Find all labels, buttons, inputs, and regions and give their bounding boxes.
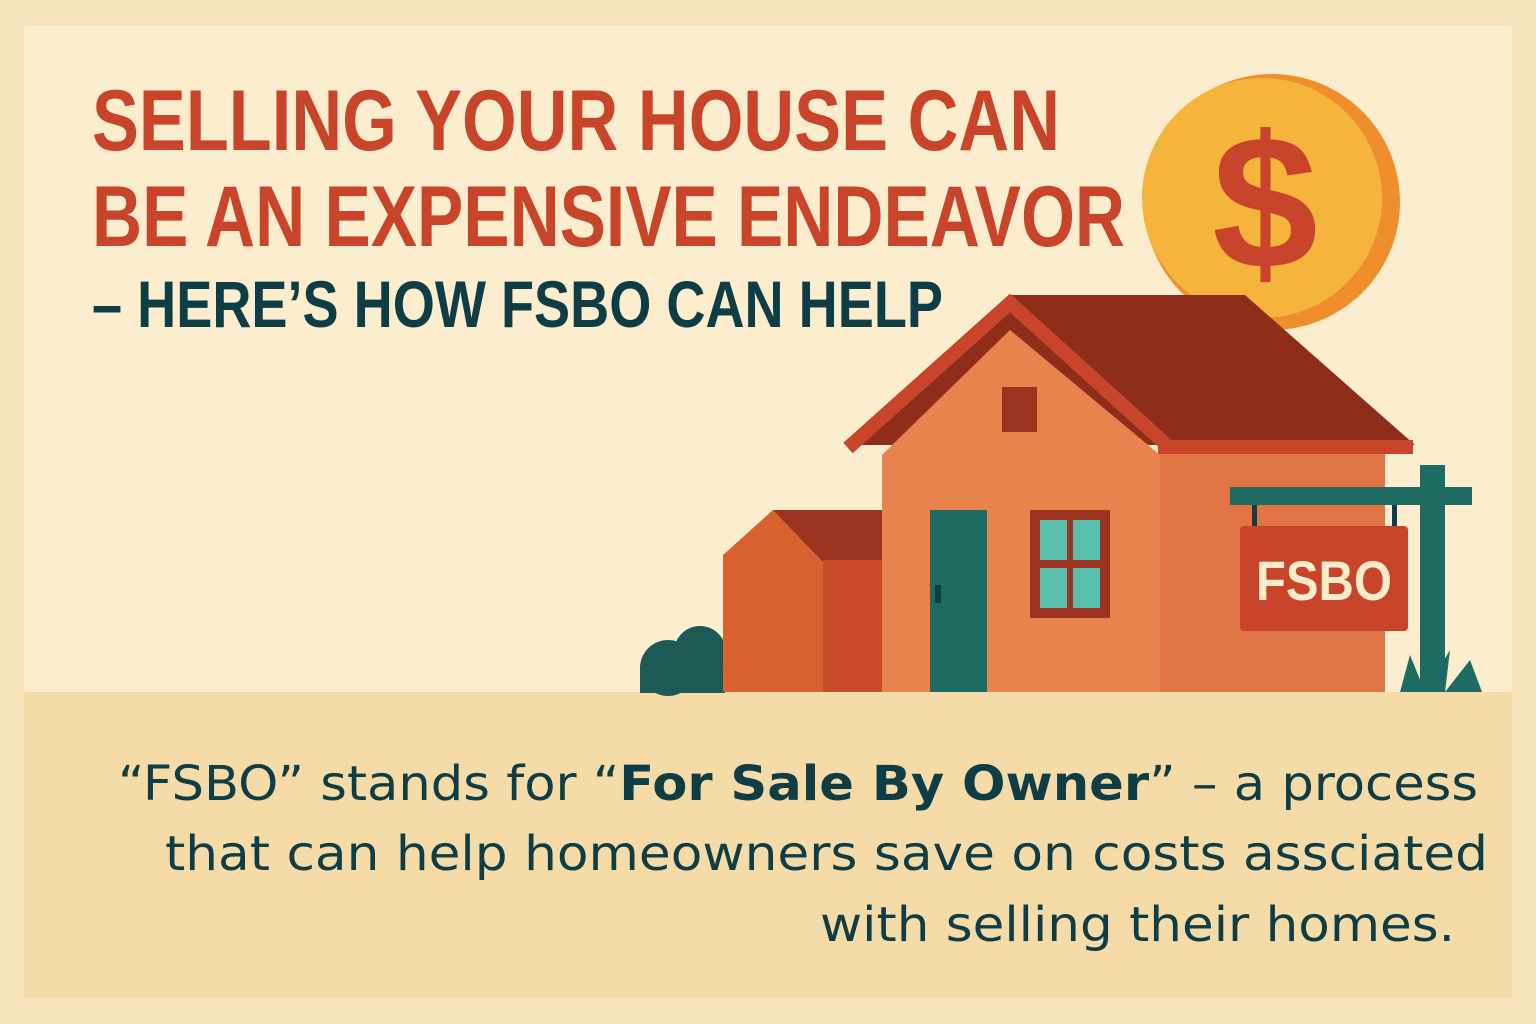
window	[1030, 510, 1110, 618]
text block: FSBO definition	[118, 756, 1488, 953]
title	[92, 73, 1125, 341]
panel: bottom band	[24, 692, 1512, 998]
house	[723, 295, 1415, 692]
front gable wall	[882, 330, 1160, 692]
attic window	[1002, 387, 1037, 432]
text block: FSBO definition: with selling their homes.	[820, 897, 1455, 953]
door	[930, 510, 987, 692]
panel: top background	[24, 26, 1512, 693]
roof	[845, 295, 1415, 445]
title: – HERE’S HOW FSBO CAN HELP	[92, 267, 943, 341]
title: BE AN EXPENSIVE ENDEAVOR	[92, 169, 1125, 265]
garage	[723, 510, 882, 692]
gable trim	[848, 303, 1170, 448]
title: SELLING YOUR HOUSE CAN	[92, 73, 1060, 169]
text block: FSBO definition: “FSBO” stands for “ For Sale By Owner ” – a process	[118, 756, 1478, 812]
sign: FSBO	[1230, 465, 1482, 692]
text block: FSBO definition: that can help homeowners save on costs assciated	[165, 826, 1488, 882]
side wall	[1158, 445, 1385, 692]
sign: FSBO: FSBO	[1256, 549, 1392, 612]
icon: bush	[640, 626, 726, 696]
icon: coin	[1142, 74, 1400, 330]
icon: coin: $	[1212, 97, 1318, 309]
